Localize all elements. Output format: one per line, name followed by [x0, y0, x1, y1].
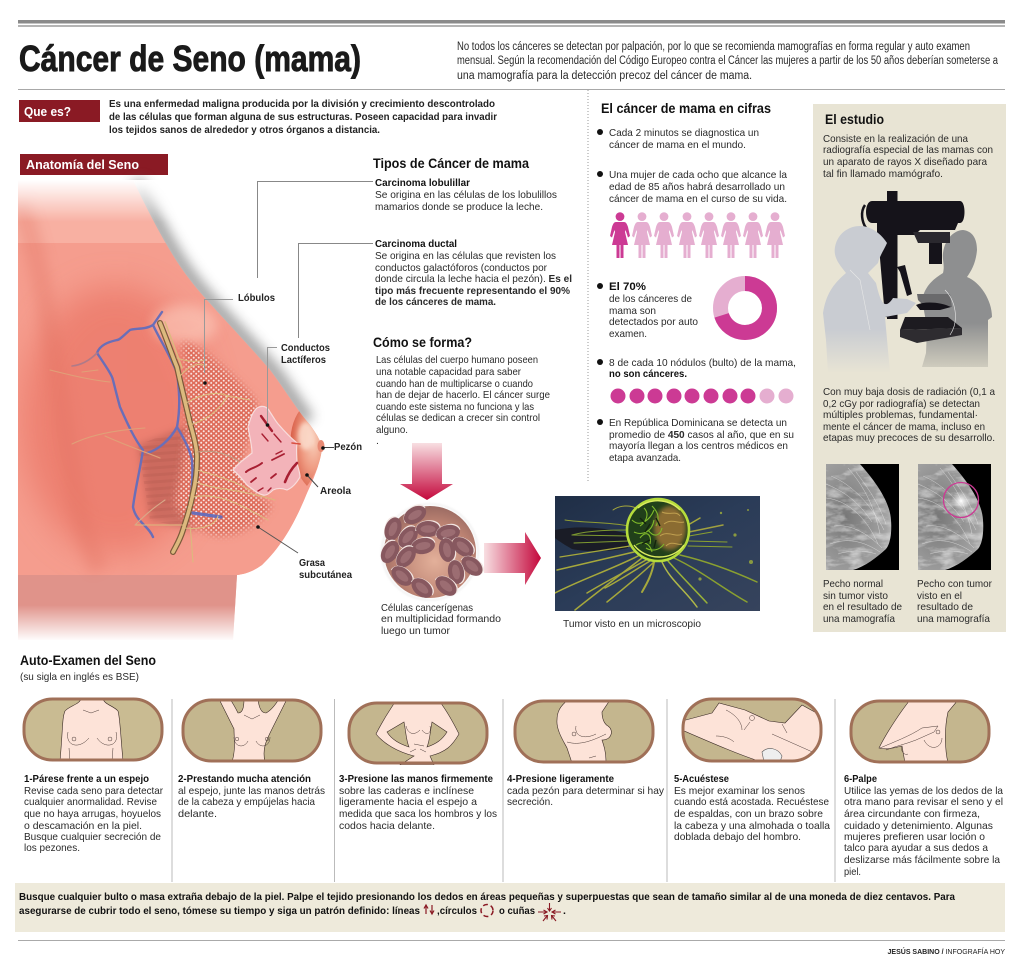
step 5 text: doblada debajo del hombro. [674, 831, 801, 843]
bullet list: Cada 2 minutos se diagnostica un [609, 127, 759, 139]
image captions: Tumor visto en un microscopio [563, 618, 701, 630]
bullet list: 8 de cada 10 nódulos (bulto) de la mama, [609, 357, 796, 369]
auto-examen heading: (su sigla en inglés es BSE) [20, 671, 139, 683]
callout dots [203, 381, 325, 529]
step 1 text: o descamación en la piel. [24, 820, 142, 832]
bullet list: mayoría llegan a los centros médicos en [609, 440, 788, 452]
estudio intro text: Consiste en la realización de una [823, 133, 968, 145]
step 4 text: cada pezón para determinar si hay [507, 785, 665, 797]
como se forma text: células se dedican a crecer sin control [376, 412, 540, 424]
mammography illustration [823, 191, 992, 373]
como se forma text: Las células del cuerpo humano poseen [376, 354, 538, 366]
mammogram captions: Pecho con tumor [917, 578, 992, 590]
illustration: step 6 [850, 700, 990, 763]
step 1 text: que no haya arrugas, hoyuelos [24, 808, 161, 820]
anatomy labels: Lóbulos [238, 292, 275, 304]
credit: JESÚS SABINO / INFOGRAFÍA HOY [888, 947, 1005, 956]
anatomy labels: Pezón [334, 441, 362, 453]
estudio body text: 0,2 cGy por radiografía) se detectan [823, 398, 980, 410]
step 1 text: 1-Párese frente a un espejo [24, 773, 149, 785]
callout lines [204, 182, 373, 553]
icon: wedges arrows [538, 903, 561, 921]
header rules [18, 20, 1005, 27]
panel: bottom note: Busque cualquier bulto o masa extraña debajo de la piel. Palpe el tejido presionando los dedos en áreas pequeñas y superpuestas que sean de tamaño similar al de una moneda de diez centavos. Para [19, 891, 955, 903]
que es label [19, 100, 100, 122]
panel: cifras [597, 101, 796, 464]
tumor microscope image [555, 496, 760, 611]
image captions: Células cancerígenas [381, 602, 473, 614]
illustration: step 2 [182, 699, 322, 762]
illustration: step 1 [23, 698, 163, 761]
tipos de cancer text: Carcinoma lobulillar [375, 177, 470, 189]
step 6 text: área circundante con firmeza, [844, 808, 980, 820]
mammogram captions: una mamografía [917, 613, 990, 625]
milk ducts [233, 406, 300, 495]
step 5 text: la cabeza y una almohada o toalla [674, 820, 830, 832]
tipos de cancer text: conductos galactóforos (conductos por [375, 262, 547, 274]
image captions: luego un tumor [381, 625, 450, 637]
step 6 text: 6-Palpe [844, 773, 877, 785]
tipos de cancer text: Carcinoma ductal [375, 238, 457, 250]
step 2 text [178, 773, 325, 820]
anatomy illustration [18, 180, 324, 641]
bullet list: El 70% [609, 281, 646, 293]
que es text: de las células que forman alguna de sus estructuras. Poseen capacidad para invadir [109, 111, 497, 123]
estudio intro text: un aparato de rayos X diseñado para [823, 156, 987, 168]
cancer cells [377, 502, 486, 602]
bullet list: etapa avanzada. [609, 452, 681, 464]
anatomy labels: Conductos [281, 342, 330, 354]
step 1 text: Revise cada seno para detectar [24, 785, 163, 797]
mammogram captions: sin tumor visto [823, 590, 888, 602]
nipple [318, 440, 324, 452]
estudio body text: etapas muy precoces de su desarrollo. [823, 432, 995, 444]
anatomy heading: Anatomía del Seno [26, 158, 139, 172]
step 1 text [24, 773, 163, 854]
ducts [50, 322, 275, 562]
bullet list: no son cánceres. [609, 368, 687, 380]
arrow down [400, 443, 453, 500]
tipos de cancer text: tipo más frecuente representando el 90% [375, 285, 571, 297]
illustration: step 3 [348, 702, 488, 765]
step 6 text: cuidado y detenimiento. Algunas [844, 820, 993, 832]
step 2 text: de la cabeza y empújelas hacia [178, 796, 315, 808]
mammogram captions: Pecho normal [823, 578, 883, 590]
como se forma text: cuando este sistema no funciona y las [376, 401, 534, 413]
step 5 text [674, 773, 830, 843]
panel: bottom note: . [563, 905, 566, 917]
illustration: step 5 [682, 698, 822, 762]
panel: bottom note [15, 883, 1005, 932]
bullet list: promedio de 450 casos al año, que en su [609, 429, 794, 441]
step 3 text: codos hacia delante. [339, 820, 435, 832]
bullet list: Una mujer de cada ocho que alcance la [609, 169, 787, 181]
areola [290, 410, 322, 486]
tipos de cancer text: de los cánceres de mama. [375, 296, 496, 308]
step 1 text: Busque cualquier secreción de [24, 831, 161, 843]
tipos de cancer text: mamarios donde se produce la leche. [375, 201, 543, 213]
anatomy labels: subcutánea [299, 569, 352, 581]
dotted separator [587, 90, 589, 482]
panel: bottom note: asegurarse de cubrir todo el seno, tómese su tiempo y siga un patrón definido: líneas [19, 905, 420, 917]
step 3 text: 3-Presione las manos firmemente [339, 773, 493, 785]
step 3 text: medida que saca los hombros y los [339, 808, 497, 820]
estudio body text [823, 386, 995, 444]
image captions: en multiplicidad formando [381, 613, 501, 625]
step 5 text: 5-Acuéstese [674, 773, 729, 785]
anatomy labels [238, 292, 362, 581]
como se forma text: Cómo se forma? [373, 335, 472, 350]
tipos de cancer text: Se origina en las células de los lobulillos [375, 189, 557, 201]
mammogram captions [823, 578, 992, 625]
step dividers [172, 699, 835, 882]
anatomy labels: Grasa [299, 557, 325, 569]
que es text [109, 98, 497, 136]
illustration: step 4 [514, 700, 654, 763]
mammogram captions: visto en el [917, 590, 962, 602]
tipos de cancer text: Tipos de Cáncer de mama [373, 156, 529, 171]
como se forma text [373, 335, 550, 447]
step 6 text: piel. [844, 866, 861, 878]
step 4 text: 4-Presione ligeramente [507, 773, 614, 785]
image captions [381, 602, 701, 637]
mammogram captions: una mamografía [823, 613, 895, 625]
bullet list [597, 127, 796, 464]
estudio body text: mente el cáncer de mama, incluso en [823, 421, 985, 433]
como se forma text: una notable capacidad para saber [376, 366, 521, 378]
tipos de cancer text [373, 156, 572, 308]
que es text: los tejidos sanos de alrededor y otros órganos a distancia. [109, 124, 380, 136]
step 3 text: ligeramente hacia el espejo a [339, 796, 477, 808]
step 4 text [507, 773, 665, 808]
step 3 text [339, 773, 497, 832]
icon: lines arrows [424, 905, 434, 914]
veins [72, 312, 221, 537]
cifras heading: El cáncer de mama en cifras [601, 101, 771, 116]
como se forma text: . [376, 435, 379, 447]
step 6 text: otra mano para revisar el seno y el [844, 796, 1003, 808]
step 4 text: secreción. [507, 796, 553, 808]
panel: el estudio [813, 104, 1006, 632]
bullet list: cáncer de mama en el curso de su vida. [609, 193, 787, 205]
step 1 text: los pezones. [24, 842, 80, 854]
intro text [457, 41, 998, 82]
step 3 text: sobre las caderas e inclínese [339, 785, 474, 797]
como se forma text: cuando han de multiplicarse o cuando [376, 378, 533, 390]
arrow right [484, 532, 541, 585]
bullet list: En República Dominicana se detecta un [609, 417, 787, 429]
step 2 text: 2-Prestando mucha atención [178, 773, 311, 785]
bullet list: edad de 85 años habrá desarrollado un [609, 181, 785, 193]
estudio intro text: radiografía especial de las mamas con [823, 144, 993, 156]
step 2 text: delante. [178, 808, 217, 820]
que es text: Es una enfermedad maligna producida por la división y crecimiento descontrolado [109, 98, 495, 110]
mammogram normal [826, 464, 899, 570]
panel: bottom note: ,círculos [437, 905, 477, 917]
tipos de cancer text: donde circula la leche hacia el pezón). Es el [375, 273, 572, 285]
anatomy labels: Areola [320, 485, 351, 497]
como se forma text: alguno. [376, 424, 408, 436]
step 6 text: deslizarse más fácilmente sobre la [844, 854, 1000, 866]
step 6 text [844, 773, 1003, 878]
bullet list: detectados por auto [609, 316, 698, 328]
anatomy heading [20, 154, 168, 175]
intro text: una mamografía para la detección precoz del cáncer de mama. [457, 70, 752, 82]
step 2 text: al espejo, junte las manos detrás [178, 785, 325, 797]
tipos de cancer text: Se origina en las células que revisten los [375, 250, 556, 262]
step 1 text: cualquier anormalidad. Revise [24, 796, 157, 808]
step 6 text: Utilice las yemas de los dedos de la [844, 785, 1003, 797]
pictogram: one in eight women [610, 212, 785, 258]
mammogram with tumor [918, 464, 991, 570]
tumor ball [628, 501, 688, 560]
step 6 text: talco para ayudar a sus dedos a [844, 842, 988, 854]
que es label: Que es? [24, 105, 71, 119]
como se forma text: han de dejar de hacerlo. El cáncer surge [376, 389, 550, 401]
estudio body text: múltiples problemas, fundamental· [823, 409, 978, 421]
estudio heading: El estudio [825, 112, 884, 127]
step 5 text: de espaldas, con un brazo sobre [674, 808, 823, 820]
step 5 text: cuando está acostada. Recuéstese [674, 796, 829, 808]
auto-examen heading: Auto-Examen del Seno [20, 653, 156, 668]
panel: bottom note: o cuñas [499, 905, 535, 917]
estudio intro text: tal fin llamado mamógrafo. [823, 168, 943, 180]
dot chart 8 of 10 [610, 388, 794, 404]
bullet list: cáncer de mama en el mundo. [609, 139, 746, 151]
donut chart 70% [720, 284, 770, 332]
step 6 text: mujeres prefieren usar loción o [844, 831, 985, 843]
step 5 text: Es mejor examinar los senos [674, 785, 805, 797]
bullet list: mama son [609, 305, 656, 317]
auto-examen heading [20, 653, 156, 683]
title: Cáncer de Seno (mama) [19, 38, 361, 79]
estudio body text: Con muy baja dosis de radiación (0,1 a [823, 386, 995, 398]
bullet list: de los cánceres de [609, 293, 692, 305]
estudio intro text [823, 133, 993, 180]
bullet list: examen. [609, 328, 647, 340]
icon: circle arrows [481, 904, 493, 916]
mammogram captions: en el resultado de [823, 601, 902, 613]
mammogram captions: resultado de [917, 601, 973, 613]
anatomy labels: Lactíferos [281, 354, 326, 366]
